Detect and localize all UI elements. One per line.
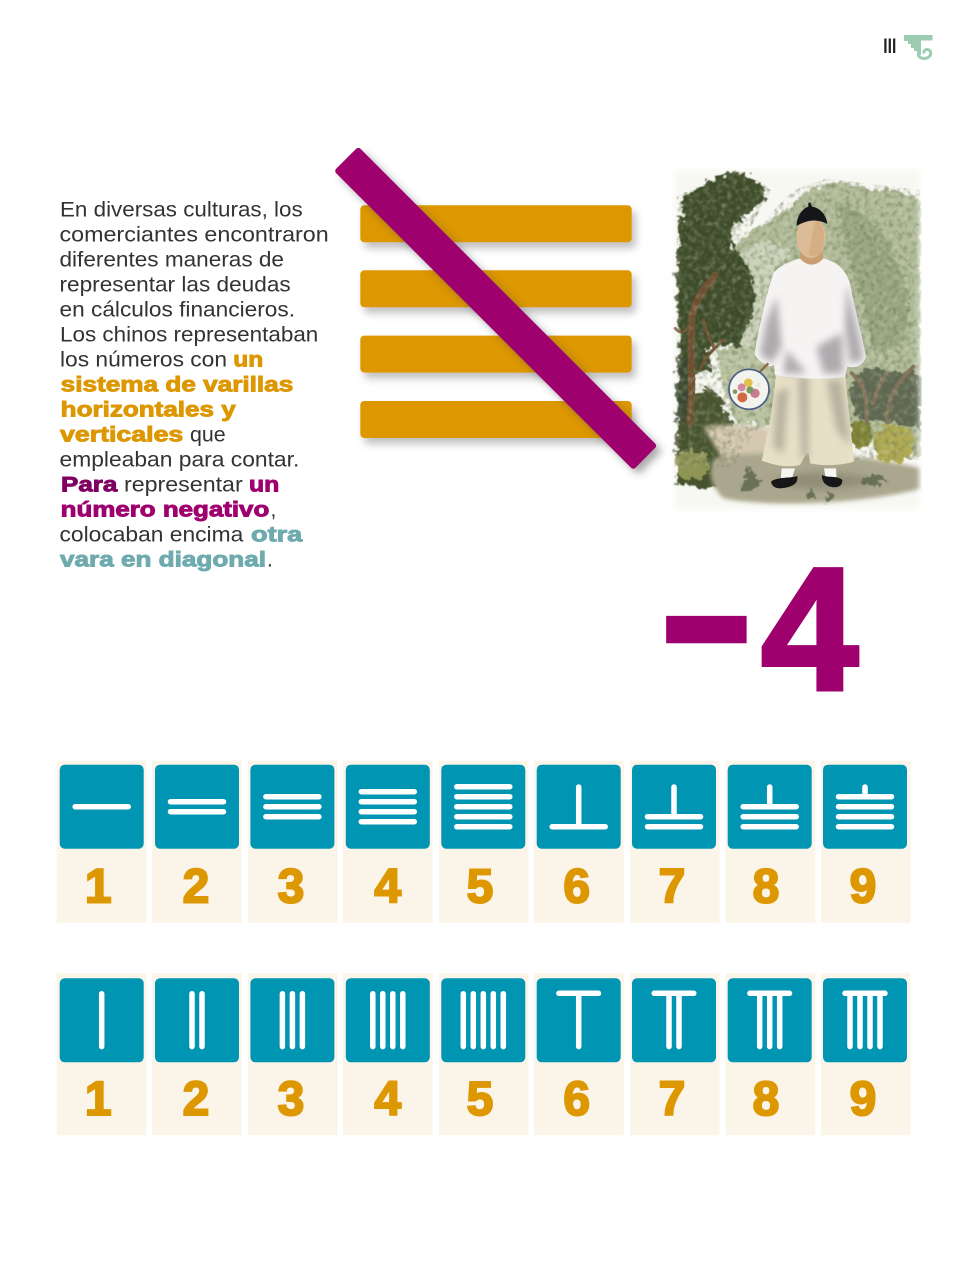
rods diagram: negative four — [338, 151, 653, 466]
card: vertical 8: 8 — [753, 1073, 779, 1126]
card: vertical 4: 4 — [374, 1073, 401, 1126]
card: horizontal 9: 9 — [850, 860, 876, 913]
big label: minus four — [660, 485, 858, 767]
body text: Los chinos representaban — [60, 324, 318, 347]
card: horizontal 8: 8 — [753, 860, 779, 913]
card: horizontal 5 — [439, 761, 528, 923]
body text: , — [270, 499, 276, 522]
paper background — [670, 165, 923, 517]
neck — [800, 250, 823, 267]
rock and ground — [703, 424, 770, 460]
page number — [883, 35, 932, 58]
card: vertical 7: 7 — [659, 1073, 685, 1126]
body text: Para — [61, 474, 118, 497]
number 111: III — [883, 35, 896, 58]
card: vertical 7 — [630, 973, 720, 1135]
card: vertical 5: 5 — [467, 1073, 493, 1126]
ground tufts — [740, 468, 890, 500]
foliage texture — [672, 167, 922, 467]
card: vertical 3: 3 — [278, 1073, 304, 1126]
card: vertical 6: 6 — [563, 1073, 590, 1126]
card: vertical 8 — [726, 973, 815, 1135]
card: horizontal 4 — [343, 761, 432, 923]
dark shrubs on the right — [848, 368, 922, 430]
body text: colocaban encima — [60, 524, 244, 547]
dark tree on the left — [675, 171, 768, 488]
row 1: horizontal rod numerals — [57, 761, 910, 923]
body text: los números con — [60, 349, 227, 372]
right trunks — [852, 367, 913, 423]
body text: horizontales y — [61, 399, 236, 422]
socks and shoes — [771, 468, 842, 488]
card: horizontal 2: 2 — [183, 860, 209, 913]
card: horizontal 7: 7 — [659, 860, 685, 913]
body text: otra — [251, 524, 303, 547]
head — [796, 217, 826, 258]
trousers — [762, 373, 854, 466]
card: vertical 2: 2 — [183, 1073, 209, 1126]
card: horizontal 3 — [248, 761, 338, 923]
face — [808, 220, 824, 256]
illustration: Chinese merchant with fan in a garden — [672, 170, 922, 508]
body text: . — [267, 549, 273, 572]
card: vertical 2 — [152, 973, 242, 1135]
card: horizontal 3: 3 — [278, 860, 304, 913]
card: horizontal 6: 6 — [563, 860, 590, 913]
card: vertical 6 — [534, 973, 624, 1135]
body text: vara en diagonal — [60, 549, 266, 572]
body text: diferentes maneras de — [60, 249, 284, 272]
card: vertical 1 — [57, 973, 146, 1135]
shirt shading — [760, 283, 863, 373]
gold horizontal rods — [360, 205, 632, 438]
card: vertical 9 — [821, 973, 910, 1135]
card: horizontal 5: 5 — [467, 860, 493, 913]
yellow bushes — [674, 421, 914, 480]
card: horizontal 2 — [152, 761, 242, 923]
fan — [729, 363, 769, 409]
digit 4: 4 — [761, 532, 858, 728]
card: vertical 9: 9 — [850, 1073, 876, 1126]
body text: representar — [124, 474, 243, 497]
body text: en cálculos financieros. — [60, 299, 295, 322]
card: horizontal 1 — [57, 761, 146, 923]
card: horizontal 9 — [821, 761, 910, 923]
card: vertical 3 — [248, 973, 338, 1135]
tree trunks — [675, 275, 723, 423]
body text: un — [233, 349, 263, 372]
body text: que — [190, 424, 226, 447]
card: horizontal 1: 1 — [85, 860, 112, 913]
card: horizontal 6 — [534, 761, 624, 923]
card: horizontal 8 — [726, 761, 815, 923]
soft paper edge — [647, 147, 943, 537]
body text: número negativo — [61, 499, 269, 522]
card: horizontal 7 — [630, 761, 720, 923]
card: horizontal 4: 4 — [374, 860, 401, 913]
body text: verticales — [60, 424, 183, 447]
hat — [797, 203, 827, 226]
body text — [60, 199, 329, 572]
card: vertical 1: 1 — [85, 1073, 112, 1126]
figure — [729, 203, 866, 488]
row 2: vertical rod numerals — [57, 973, 910, 1135]
trouser shading — [773, 377, 850, 460]
infographic page — [56, 35, 932, 1136]
body text: comerciantes encontraron — [60, 224, 329, 247]
shirt — [755, 258, 866, 379]
magenta diagonal rod — [338, 151, 653, 466]
body text: En diversas culturas, los — [60, 199, 303, 222]
pale foliage — [717, 183, 922, 460]
body text: empleaban para contar. — [60, 449, 299, 472]
card: vertical 5 — [439, 973, 528, 1135]
body text: un — [249, 474, 279, 497]
body text: sistema de varillas — [61, 374, 293, 397]
body text: representar las deudas — [60, 274, 291, 297]
minus sign: − — [660, 485, 753, 767]
card: vertical 4 — [343, 973, 432, 1135]
icon: stepped fret — [904, 35, 932, 58]
